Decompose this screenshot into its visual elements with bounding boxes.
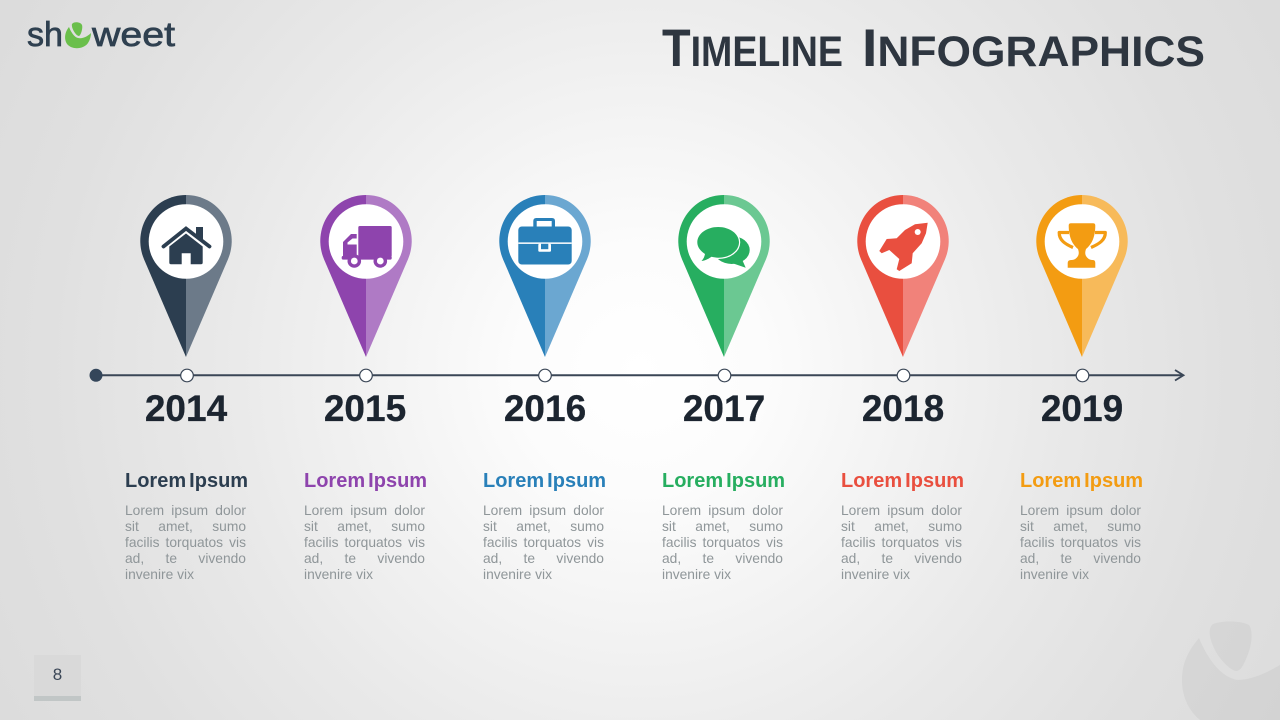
body text: facilis torquatos vis — [483, 535, 604, 550]
body text: facilis torquatos vis — [125, 535, 246, 550]
icon: house — [164, 227, 210, 264]
year 2015: 2015 — [324, 388, 406, 429]
title: INFOGRAPHICS — [862, 19, 1205, 78]
logo text: sh: sh — [27, 16, 63, 54]
body text: sit amet, sumo — [125, 519, 246, 534]
body text: invenire vix — [662, 567, 731, 582]
column 2014 — [125, 388, 248, 582]
icon: rocket — [879, 223, 928, 271]
year 2014: 2014 — [145, 388, 227, 429]
heading: Lorem Ipsum — [1020, 470, 1143, 492]
icon: trophy — [1059, 223, 1105, 268]
heading: Lorem Ipsum — [483, 470, 606, 492]
year 2019: 2019 — [1041, 388, 1123, 429]
body text: ad, te vivendo — [841, 551, 962, 566]
body text — [125, 503, 246, 582]
body text: ad, te vivendo — [125, 551, 246, 566]
logo text: weet: weet — [91, 16, 176, 54]
pin 2015: truck — [320, 195, 412, 357]
heading: Lorem Ipsum — [662, 470, 785, 492]
icon: truck — [342, 226, 392, 268]
column 2015 — [304, 388, 427, 582]
column 2016 — [483, 388, 606, 582]
body text: sit amet, sumo — [483, 519, 604, 534]
page number: 8 — [53, 665, 62, 684]
column 2019 — [1020, 388, 1143, 582]
title: TIMELINE — [662, 19, 843, 78]
body text: invenire vix — [841, 567, 910, 582]
body text: Lorem ipsum dolor — [841, 503, 962, 518]
body text — [662, 503, 783, 582]
pin 2017: chat bubbles — [678, 195, 770, 357]
year 2017: 2017 — [683, 388, 765, 429]
column 2017 — [662, 388, 785, 582]
body text: ad, te vivendo — [304, 551, 425, 566]
body text — [1020, 503, 1141, 582]
icon: briefcase — [518, 218, 572, 264]
body text: Lorem ipsum dolor — [304, 503, 425, 518]
body text: Lorem ipsum dolor — [125, 503, 246, 518]
body text: sit amet, sumo — [662, 519, 783, 534]
year 2018: 2018 — [862, 388, 944, 429]
icon: chat bubbles — [697, 227, 750, 268]
body text: sit amet, sumo — [841, 519, 962, 534]
body text — [841, 503, 962, 582]
logo mark: green drop and crescent — [65, 22, 91, 48]
body text: ad, te vivendo — [1020, 551, 1141, 566]
heading: Lorem Ipsum — [841, 470, 964, 492]
body text: sit amet, sumo — [304, 519, 425, 534]
page number — [34, 655, 81, 701]
body text: invenire vix — [125, 567, 194, 582]
heading: Lorem Ipsum — [125, 470, 248, 492]
logo — [27, 16, 176, 54]
body text: facilis torquatos vis — [841, 535, 962, 550]
body text — [483, 503, 604, 582]
body text: ad, te vivendo — [662, 551, 783, 566]
pin 2016: briefcase — [499, 195, 591, 357]
body text: facilis torquatos vis — [304, 535, 425, 550]
body text: invenire vix — [1020, 567, 1089, 582]
body text: ad, te vivendo — [483, 551, 604, 566]
title — [662, 19, 1205, 78]
body text: Lorem ipsum dolor — [483, 503, 604, 518]
pin 2018: rocket — [857, 195, 949, 357]
pin 2019: trophy — [1036, 195, 1128, 357]
column 2018 — [841, 388, 964, 582]
body text: facilis torquatos vis — [662, 535, 783, 550]
body text: Lorem ipsum dolor — [662, 503, 783, 518]
body text — [304, 503, 425, 582]
heading: Lorem Ipsum — [304, 470, 427, 492]
year 2016: 2016 — [504, 388, 586, 429]
body text: invenire vix — [483, 567, 552, 582]
body text: Lorem ipsum dolor — [1020, 503, 1141, 518]
pin 2014: house — [140, 195, 232, 357]
body text: invenire vix — [304, 567, 373, 582]
body text: sit amet, sumo — [1020, 519, 1141, 534]
body text: facilis torquatos vis — [1020, 535, 1141, 550]
